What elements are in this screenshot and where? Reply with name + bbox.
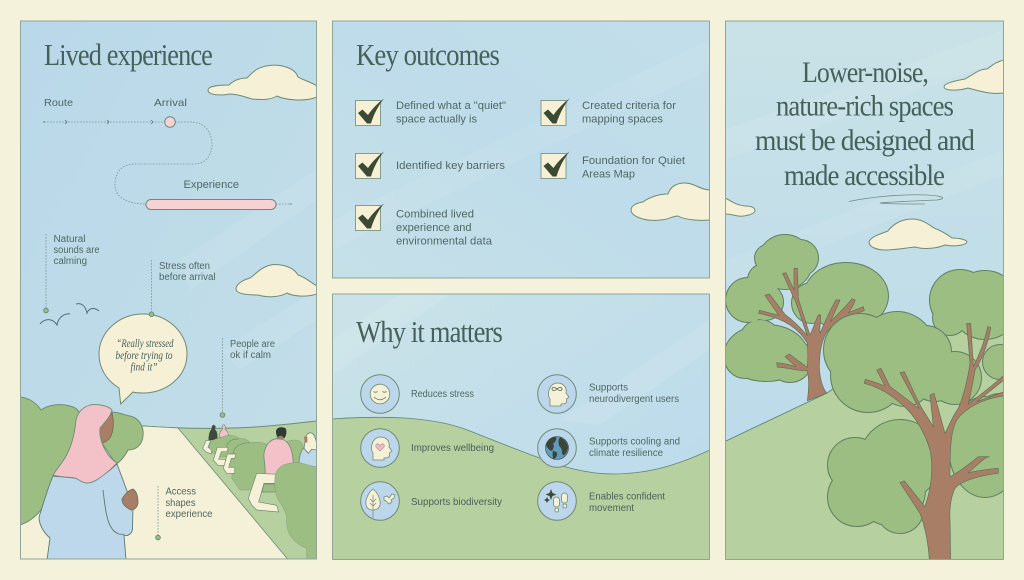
callout: access shapes experience: shapes xyxy=(166,498,196,509)
item: supports biodiversity: Supports biodiversity xyxy=(411,497,502,508)
bench: centre xyxy=(223,454,236,473)
person: woman in cream scarf xyxy=(298,448,316,466)
item: created criteria: mapping spaces xyxy=(582,114,664,126)
speech bubble with quote: find it” xyxy=(130,362,158,374)
item: identified barriers: Identified key barriers xyxy=(396,160,506,172)
far right scene: people, benches and bushes xyxy=(203,425,317,560)
cloud: top right xyxy=(208,65,317,100)
statement text: Lower-noise, xyxy=(802,57,928,89)
birds xyxy=(40,304,99,325)
item: confident movement: movement xyxy=(589,503,634,514)
bush: behind man xyxy=(287,440,303,463)
cloud: middle right xyxy=(236,265,317,297)
callout: people are ok if calm xyxy=(220,338,275,417)
speech bubble with quote: before trying to xyxy=(116,350,173,362)
item: combined data: environmental data xyxy=(396,236,493,248)
bush: left xyxy=(20,397,82,525)
scribble underline xyxy=(849,195,943,204)
panel: why it matters xyxy=(332,294,710,560)
route diagram xyxy=(44,97,291,210)
item: created criteria xyxy=(541,98,676,126)
callout: stress before arrival: Stress often xyxy=(159,261,210,272)
callout: stress before arrival xyxy=(152,260,216,312)
item: combined data: Combined lived xyxy=(396,208,474,220)
statement text: must be designed and xyxy=(755,125,975,157)
bushes: far group xyxy=(209,435,267,490)
callout: access shapes experience: experience xyxy=(166,509,213,520)
callout: natural sounds: sounds are xyxy=(54,245,100,256)
item: defined quiet space xyxy=(356,98,506,126)
path xyxy=(20,426,288,560)
item: cooling and climate: climate resilience xyxy=(589,448,663,459)
callout: stress before arrival: before arrival xyxy=(159,272,216,283)
person: woman in hijab xyxy=(39,405,138,560)
heading: lived experience: Lived experience xyxy=(44,37,212,72)
bench: far xyxy=(203,441,211,454)
bench: near xyxy=(248,473,279,512)
bench: middle xyxy=(213,447,228,465)
distant person: pink xyxy=(219,425,229,437)
item: cooling and climate: Supports cooling and xyxy=(589,436,680,448)
panel: call to action with trees xyxy=(725,21,1024,560)
callout: natural sounds: calming xyxy=(54,256,87,267)
item: cooling and climate xyxy=(538,429,680,467)
speech bubble with quote xyxy=(99,312,187,404)
callout: natural sounds xyxy=(44,234,100,313)
item: reduces stress: Reduces stress xyxy=(411,389,474,400)
heading: why it matters: Why it matters xyxy=(356,314,502,349)
callout: people are ok if calm: People are xyxy=(230,339,275,350)
item: confident movement: Enables confident xyxy=(589,492,665,502)
callout: access shapes experience: Access xyxy=(166,486,196,498)
item: confident movement xyxy=(538,482,665,520)
item: supports biodiversity xyxy=(361,482,502,520)
item: combined data: experience and xyxy=(396,222,472,234)
route diagram: Experience xyxy=(184,179,239,191)
item: foundation map: Foundation for Quiet xyxy=(582,155,685,167)
heading: key outcomes: Key outcomes xyxy=(356,37,499,72)
cloud xyxy=(631,183,710,220)
item: created criteria: Created criteria for xyxy=(582,100,676,112)
panel: lived experience xyxy=(20,21,317,560)
item: improves wellbeing: Improves wellbeing xyxy=(411,443,494,454)
item: identified barriers xyxy=(356,152,506,178)
item: neurodivergent xyxy=(538,375,679,413)
item: neurodivergent: neurodivergent users xyxy=(589,394,679,405)
item: improves wellbeing xyxy=(361,429,494,467)
cloud: left xyxy=(725,198,755,216)
ground: light green hill xyxy=(143,421,317,560)
callout: people are ok if calm: ok if calm xyxy=(230,350,271,361)
tree: back xyxy=(725,235,888,401)
statement text: made accessible xyxy=(784,160,945,192)
person: man in pink xyxy=(276,436,284,440)
hill xyxy=(725,300,1004,560)
item: foundation map: Areas Map xyxy=(582,168,635,180)
cloud: top right xyxy=(944,60,1004,93)
item: defined quiet space: Defined what a "quiet" xyxy=(396,100,506,112)
cloud: middle xyxy=(869,219,967,250)
item: neurodivergent: Supports xyxy=(589,382,628,394)
route diagram: Arrival xyxy=(154,97,187,109)
tree: front xyxy=(824,270,1024,560)
route diagram: Route xyxy=(44,97,73,109)
green hill xyxy=(332,417,710,560)
item: defined quiet space: space actually is xyxy=(396,114,477,126)
item: combined data xyxy=(356,204,493,248)
callout: access shapes experience xyxy=(156,486,213,540)
item: foundation map xyxy=(541,152,685,180)
panel: key outcomes xyxy=(332,21,710,278)
speech bubble with quote: “Really stressed xyxy=(116,338,174,350)
bush: behind person right xyxy=(100,412,143,464)
bush: front right xyxy=(275,463,317,560)
statement text xyxy=(755,57,975,192)
item: reduces stress xyxy=(361,375,474,413)
statement text: nature-rich spaces xyxy=(776,90,953,122)
callout: natural sounds: Natural xyxy=(54,234,86,245)
distant person: dark xyxy=(209,425,217,440)
